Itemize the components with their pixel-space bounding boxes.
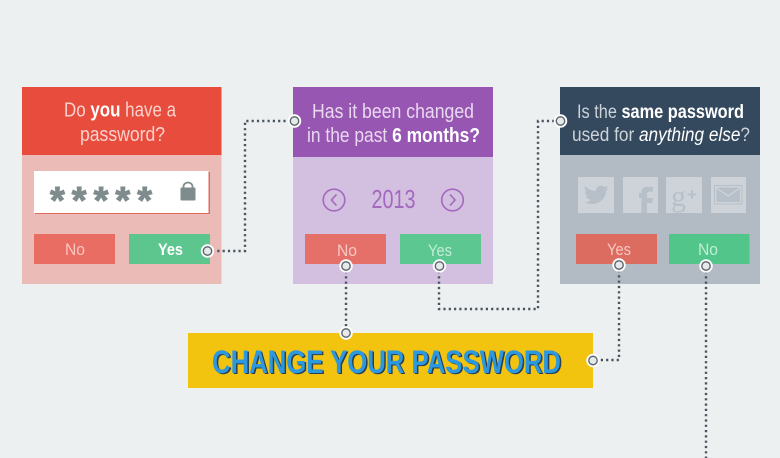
icon: google plus: g bbox=[671, 180, 686, 213]
button: yes bbox=[129, 234, 210, 264]
icon: google plus: + bbox=[687, 185, 697, 204]
icon: facebook bbox=[623, 177, 658, 213]
button: yes bbox=[576, 234, 657, 264]
heading: changed in past 6 months: Has it been changed bbox=[312, 100, 474, 123]
password field bbox=[34, 171, 210, 222]
panel: changed in past 6 months bbox=[293, 87, 493, 284]
heading: do you have a password: password? bbox=[80, 124, 165, 146]
heading: do you have a password bbox=[22, 87, 222, 155]
icon: previous arrow bbox=[323, 189, 345, 211]
icon: email bbox=[711, 177, 746, 213]
password field: ***** bbox=[50, 180, 152, 222]
button: no bbox=[34, 234, 115, 264]
button: yes: Yes bbox=[158, 241, 183, 259]
heading: same password: Is the same password bbox=[577, 101, 744, 123]
panel: same password used elsewhere bbox=[560, 87, 760, 284]
button: no bbox=[669, 234, 750, 264]
panel: do you have a password bbox=[22, 87, 222, 284]
heading: changed in past 6 months bbox=[293, 87, 493, 157]
arrow: no continues down bbox=[705, 271, 707, 458]
icon: twitter bbox=[578, 177, 614, 213]
icon: next arrow bbox=[442, 189, 463, 211]
heading: same password bbox=[560, 87, 760, 155]
year: 2013 bbox=[372, 184, 416, 214]
button: yes: Yes bbox=[607, 240, 631, 259]
connector nodes bbox=[202, 115, 712, 366]
button: no: No bbox=[337, 241, 357, 260]
icon: padlock bbox=[180, 182, 196, 200]
arrow: yes to same password bbox=[439, 121, 556, 309]
arrow: yes to changed in past 6 months bbox=[212, 121, 290, 251]
button: no: No bbox=[698, 240, 718, 259]
arrow: no to change your password bbox=[345, 271, 347, 328]
banner: change your password: CHANGE YOUR PASSWORD bbox=[212, 344, 561, 380]
arrow: yes to change your password bbox=[598, 270, 619, 360]
button: no bbox=[305, 234, 386, 264]
button: yes: Yes bbox=[428, 241, 452, 260]
button: no: No bbox=[65, 240, 85, 259]
heading: same password: used for anything else? bbox=[572, 124, 750, 146]
banner: change your password: CHANGE YOUR PASSWORD bbox=[214, 345, 562, 381]
icon: google plus bbox=[666, 177, 702, 213]
banner: change your password bbox=[188, 333, 593, 388]
heading: do you have a password: Do you have a bbox=[64, 100, 177, 122]
heading: changed in past 6 months: in the past 6 months? bbox=[307, 124, 480, 147]
button: yes bbox=[400, 234, 481, 264]
